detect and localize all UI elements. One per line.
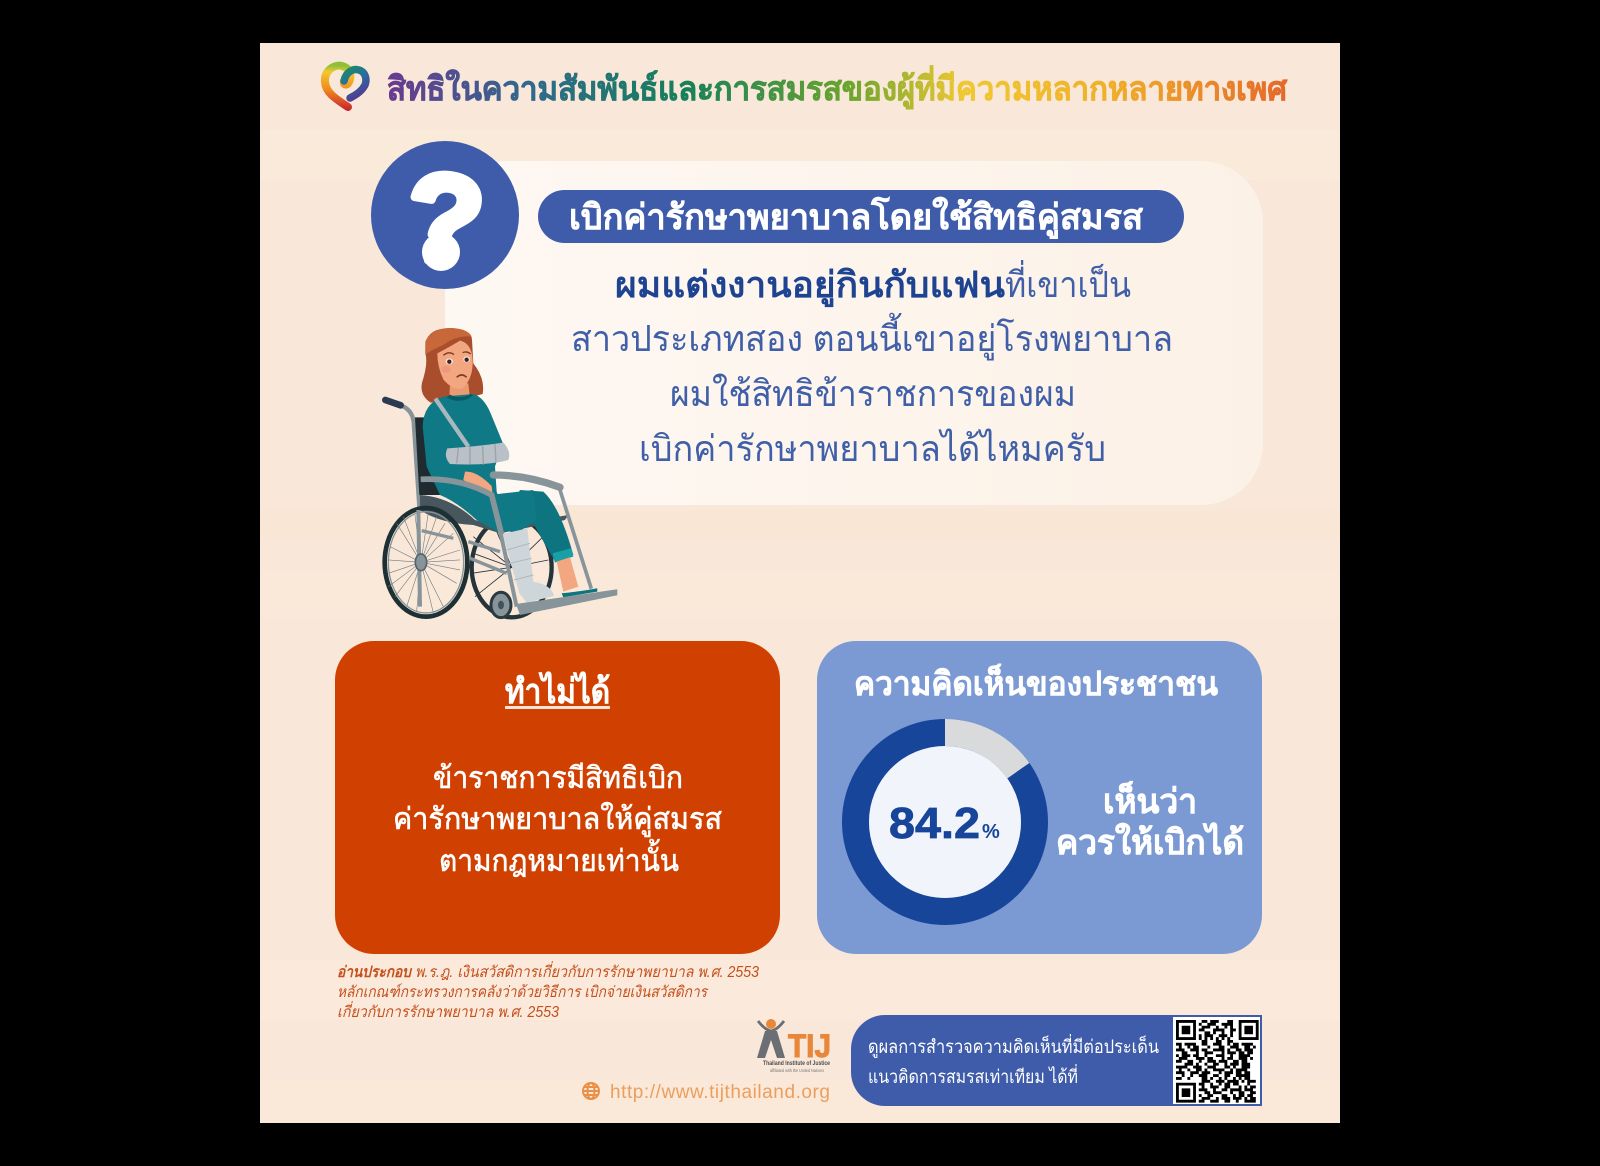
- donut chart 84.2%: %: [982, 821, 1000, 843]
- logo: TIJ: Thailand Institute of Justice: [763, 1061, 831, 1067]
- near armrest: [421, 479, 502, 535]
- answer text: [393, 762, 722, 878]
- far wheel: [472, 517, 552, 617]
- donut chart 84.2%: [856, 732, 1034, 912]
- opinion text: ควรให้เบิกได้: [1056, 822, 1244, 862]
- question text: เบิกค่ารักษาพยาบาลได้ไหมครับ: [639, 428, 1106, 469]
- caster wheel: [491, 592, 511, 618]
- far armrest: [493, 475, 560, 487]
- panel: survey link: [851, 1015, 1262, 1106]
- main wheel: [385, 508, 507, 617]
- icon: question mark circle: ?: [398, 146, 491, 293]
- hand: [463, 472, 493, 495]
- panel: public opinion: [817, 641, 1262, 954]
- question text: ผมใช้สิทธิข้าราชการของผม: [670, 373, 1076, 414]
- eyes and mouth: [446, 358, 453, 364]
- logo: TIJ: affiliated with the United Nations: [770, 1068, 825, 1073]
- opinion text: [1056, 780, 1244, 862]
- opinion text: เห็นว่า: [1103, 780, 1197, 821]
- panel: page background: [260, 43, 1340, 1123]
- hair: [421, 328, 483, 403]
- icon: globe: [583, 1083, 599, 1099]
- panel: answer: [335, 641, 780, 954]
- answer text: ตามกฎหมายเท่านั้น: [439, 839, 679, 878]
- panel: question bubble: [445, 161, 1263, 505]
- footplate: [516, 589, 617, 615]
- push handle and back post: [401, 405, 419, 507]
- survey text: ดูผลการสำรวจความคิดเห็นที่มีต่อประเด็น: [868, 1034, 1159, 1058]
- arm cast: [446, 443, 509, 464]
- title: สิทธิในความสัมพันธ์และการสมรสของผู้ที่มีความหลากหลายทางเพศ: [387, 65, 1288, 110]
- answer text: ค่ารักษาพยาบาลให้คู่สมรส: [393, 802, 722, 837]
- footnote references: พ.ร.ฎ. เงินสวัสดิการเกี่ยวกับการรักษาพยาบาล พ.ศ. 2553: [415, 961, 759, 981]
- icon: question mark circle: [371, 141, 519, 293]
- question text: [571, 260, 1173, 469]
- illustration: woman in wheelchair: [385, 328, 617, 618]
- answer text: ข้าราชการมีสิทธิเบิก: [433, 762, 683, 795]
- far leg: [503, 490, 573, 562]
- torso: [423, 394, 517, 533]
- logo: TIJ: [757, 1019, 831, 1073]
- neck and face: [449, 383, 470, 402]
- footnote references: หลักเกณฑ์กระทรวงการคลังว่าด้วยวิธีการ เบิกจ่ายเงินสวัสดิการ: [337, 983, 708, 1001]
- question text: สาวประเภทสอง ตอนนี้เขาอยู่โรงพยาบาล: [571, 312, 1173, 361]
- answer heading: ทำไม่ได้: [505, 671, 610, 711]
- donut chart 84.2%: 84.2: [889, 799, 980, 848]
- opinion heading: ความคิดเห็นของประชาชน: [854, 663, 1218, 702]
- seat and cushion: [420, 495, 568, 533]
- survey text: [868, 1034, 1159, 1087]
- survey text: แนวคิดการสมรสเท่าเทียม ได้ที่: [868, 1064, 1078, 1087]
- footnote references: เกี่ยวกับการรักษาพยาบาล พ.ศ. 2553: [337, 1001, 559, 1021]
- footnote references: อ่านประกอบ: [337, 964, 413, 981]
- logo: TIJ: TIJ: [788, 1028, 831, 1064]
- leg cast: [503, 528, 554, 603]
- heading pill: [538, 190, 1184, 243]
- heading pill: เบิกค่ารักษาพยาบาลโดยใช้สิทธิคู่สมรส: [569, 196, 1144, 239]
- footnote references: [337, 961, 759, 1021]
- foot and shoe: [557, 557, 578, 592]
- question text: ผมแต่งงานอยู่กินกับแฟน: [615, 264, 1005, 308]
- sling strap: [435, 399, 468, 447]
- website link: http://www.tijthailand.org: [610, 1082, 830, 1103]
- back rest: [415, 417, 443, 495]
- QR code: [1173, 1017, 1260, 1104]
- icon: rainbow heart logo: [325, 66, 366, 107]
- question text: ที่เขาเป็น: [1005, 260, 1131, 305]
